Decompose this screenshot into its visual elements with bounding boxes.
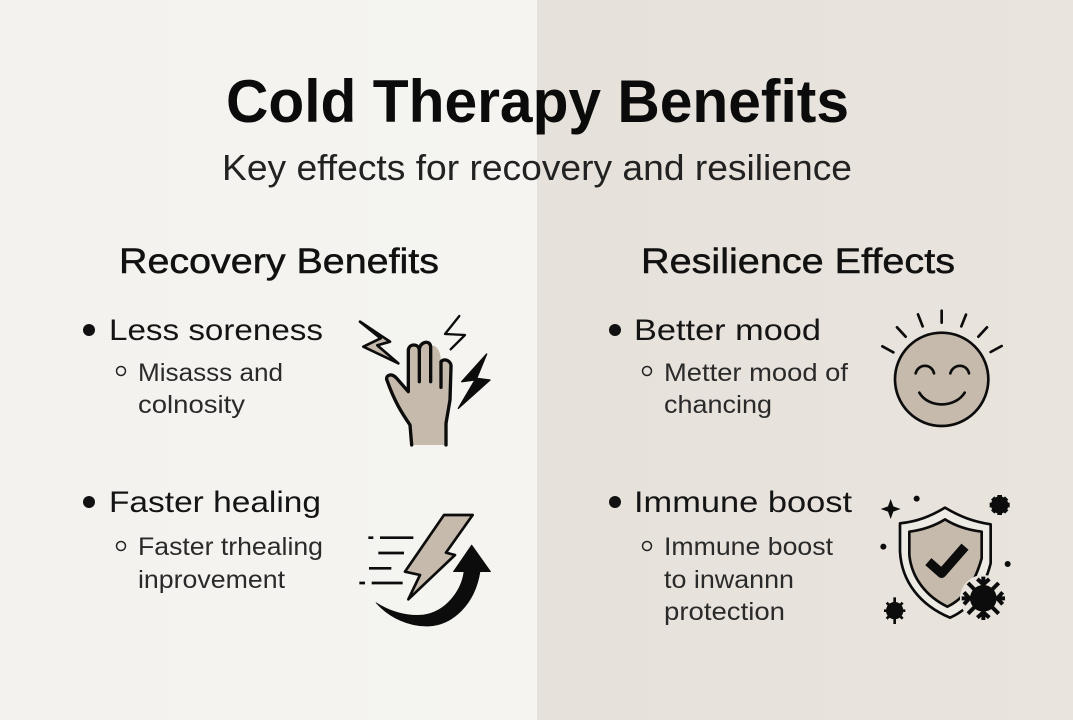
item: immune boost: Immune boost xyxy=(664,533,833,561)
subtitle: Key effects for recovery and resilience xyxy=(222,147,852,188)
icon: shield with check and virus particles xyxy=(880,495,1011,624)
icon: sore hand with lightning bolts xyxy=(360,316,490,445)
item: less soreness: colnosity xyxy=(138,391,246,419)
item: faster healing xyxy=(83,486,323,594)
panel: recovery benefits xyxy=(0,0,537,720)
item: faster healing: inprovement xyxy=(138,566,285,594)
heading: resilience effects: Resilience Effects xyxy=(641,242,955,281)
item: less soreness: Misasss and xyxy=(138,359,283,387)
item: less soreness: Less soreness xyxy=(109,314,323,347)
panel: resilience effects xyxy=(537,0,1073,720)
heading: recovery benefits: Recovery Benefits xyxy=(119,242,439,281)
item: immune boost: to inwannn xyxy=(664,566,794,594)
item: immune boost: protection xyxy=(664,598,785,626)
item: immune boost: Immune boost xyxy=(634,486,853,519)
item: better mood xyxy=(609,314,848,419)
item: less soreness xyxy=(83,314,323,419)
item: immune boost xyxy=(609,486,853,626)
icon: lightning bolt with curved arrow xyxy=(359,515,491,626)
icon: smiling sun face xyxy=(882,311,1002,426)
item: faster healing: Faster trhealing xyxy=(138,533,323,561)
item: better mood: Better mood xyxy=(634,314,821,347)
item: better mood: Metter mood of xyxy=(664,359,848,387)
title: Cold Therapy Benefits xyxy=(226,68,849,135)
item: better mood: chancing xyxy=(664,391,772,419)
item: faster healing: Faster healing xyxy=(109,486,321,519)
